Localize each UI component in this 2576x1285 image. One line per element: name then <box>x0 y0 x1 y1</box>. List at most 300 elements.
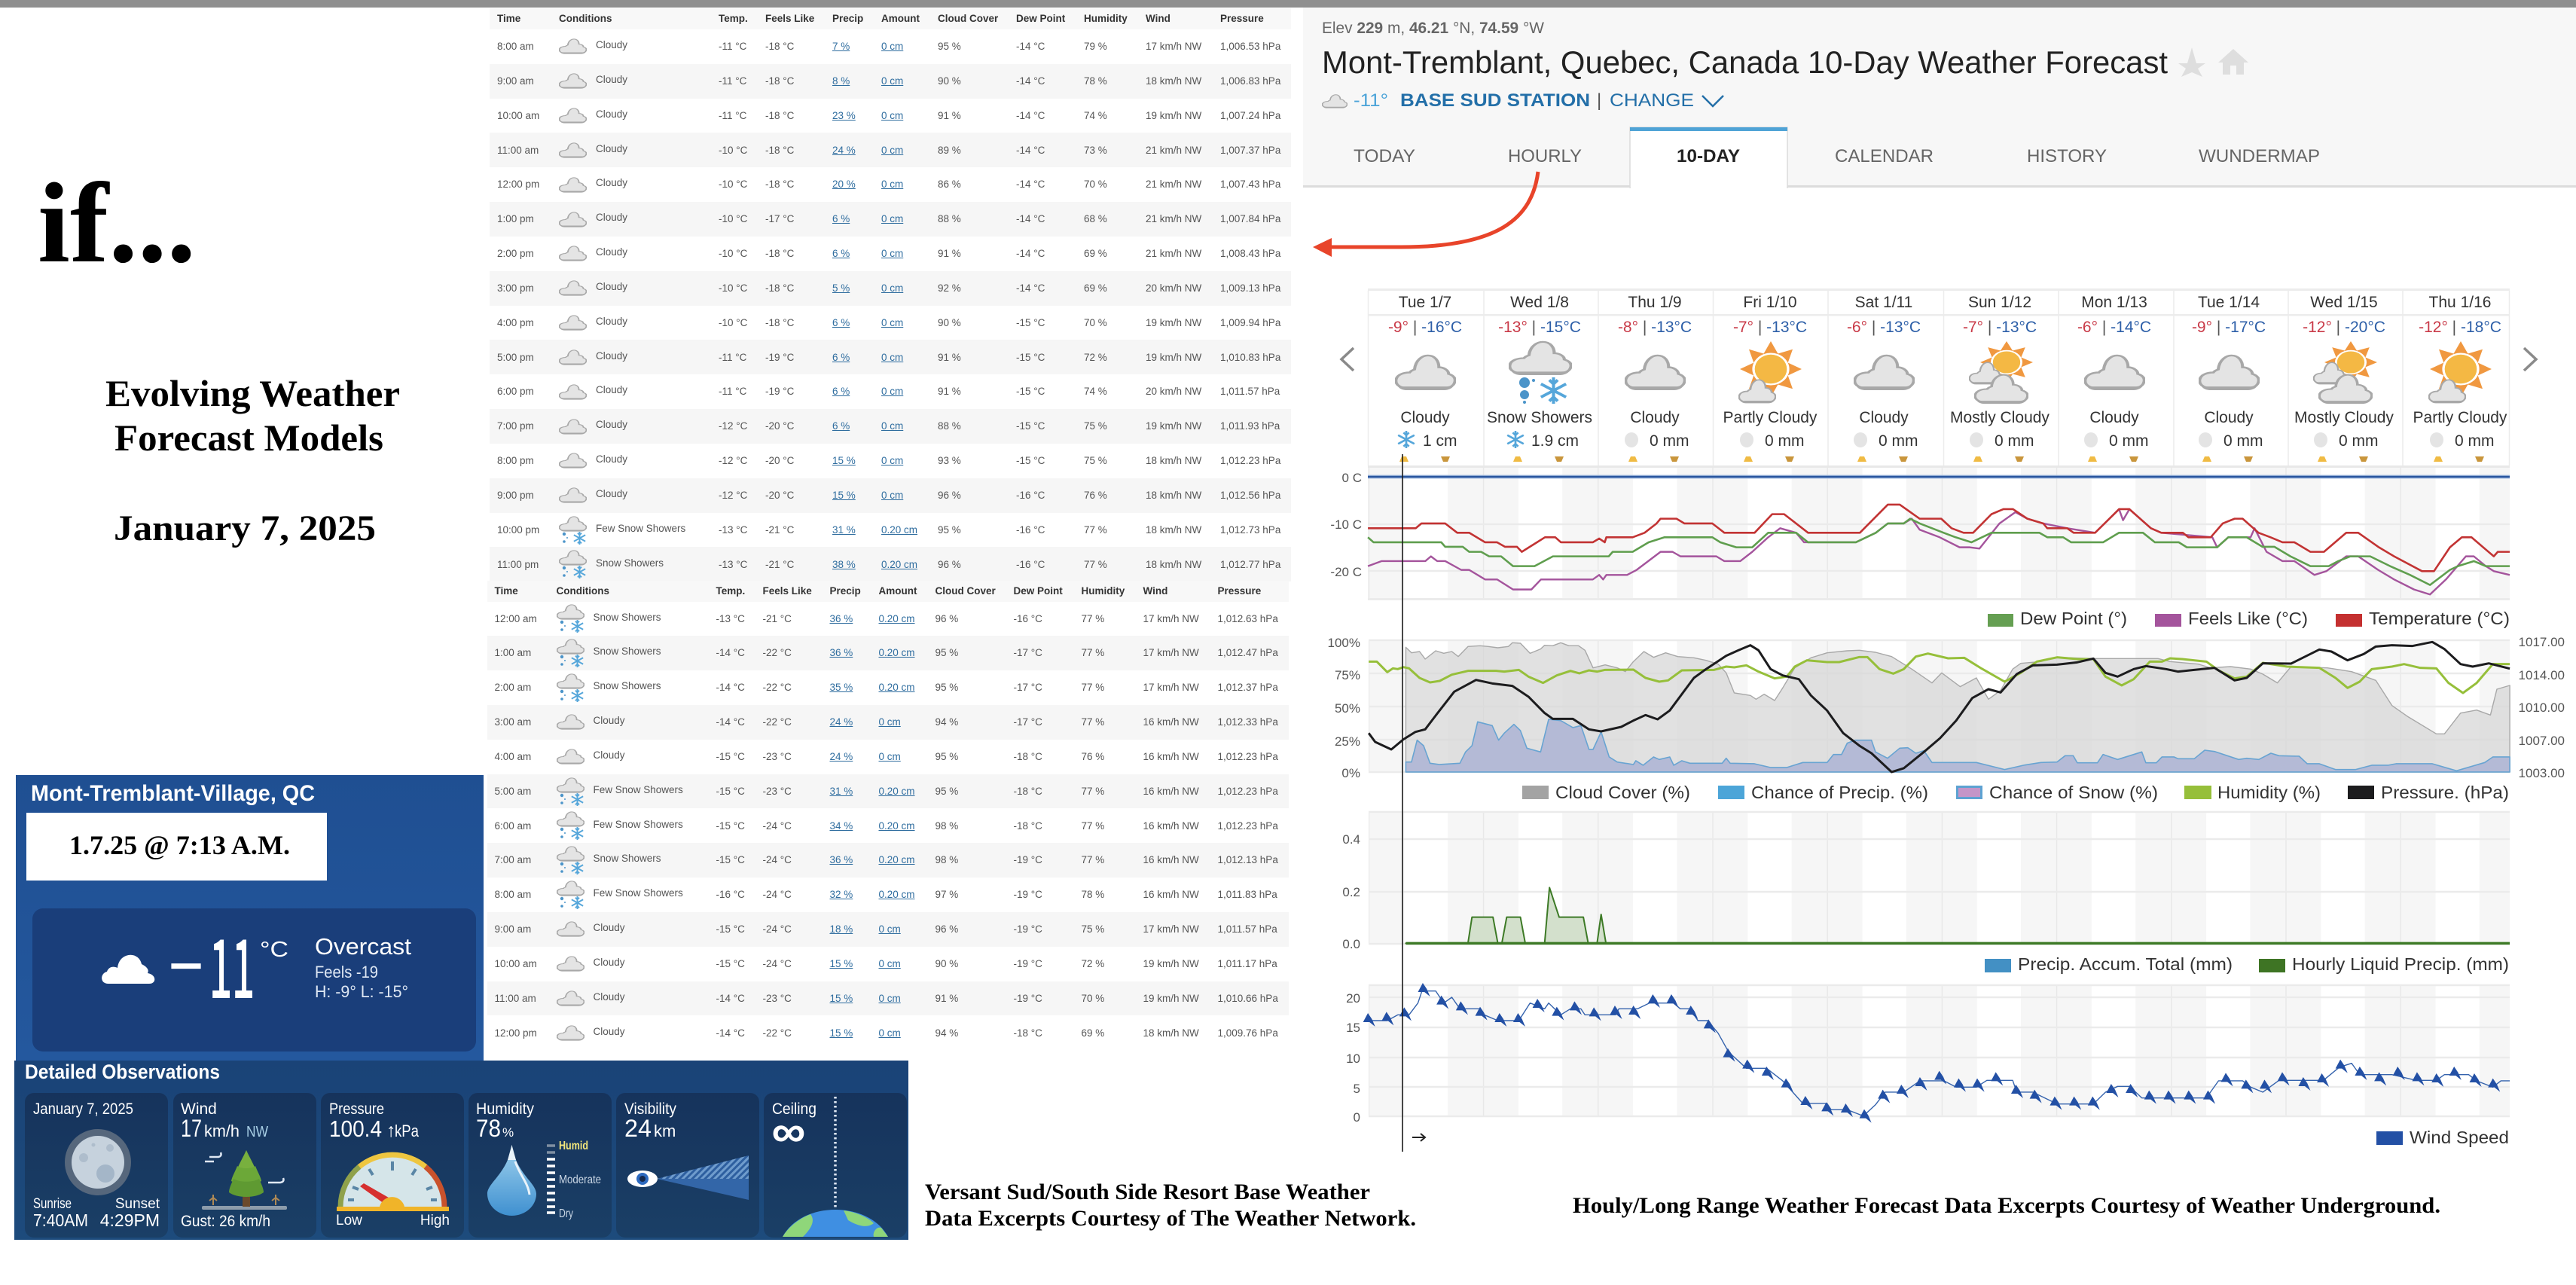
row 4:00 pm: 90 % <box>938 317 961 328</box>
card: ceiling <box>764 1093 907 1238</box>
row 7:00 pm: -20 °C <box>765 420 794 432</box>
right axis labels <box>2519 635 2565 780</box>
day: Thu 1/16 <box>2413 294 2507 462</box>
day: Wed 1/15: 0 mm <box>2339 432 2379 450</box>
day: Tue 1/7: Cloudy <box>1400 409 1450 426</box>
legend: atmosphere: Chance of Snow (%) <box>1989 783 2158 802</box>
card: date and moon: 4:29PM <box>100 1210 160 1230</box>
card: pressure: High <box>420 1213 450 1229</box>
day: Thu 1/9: -8° | -13°C <box>1618 319 1692 336</box>
row 6:00 pm: 1,011.57 hPa <box>1220 386 1280 397</box>
row 1:00 pm: 88 % <box>938 213 961 224</box>
row 5:00 am: -23 °C <box>762 786 792 797</box>
table header: Time <box>497 13 520 24</box>
row 6:00 am: -24 °C <box>762 820 792 832</box>
row 7:00 pm: 0 cm <box>881 420 903 432</box>
row 11:00 am: 0 cm <box>881 145 903 156</box>
legend: atmosphere: Chance of Precip. (%) <box>1751 783 1928 802</box>
table header: Temp. <box>719 13 748 24</box>
row 9:00 am <box>487 912 1288 947</box>
left axis labels <box>1328 636 1360 780</box>
area: hourly liquid precipitation <box>1406 887 1606 943</box>
area: cloud cover <box>1406 642 2510 772</box>
row 11:00 am: Cloudy <box>596 143 627 154</box>
row 1:00 pm: 1:00 pm <box>497 213 534 224</box>
row 9:00 pm: -16 °C <box>1016 490 1045 501</box>
row 6:00 pm: 6 % <box>832 386 850 397</box>
row 8:00 am: 78 % <box>1082 889 1104 900</box>
navigation tabs: HOURLY <box>1508 146 1582 166</box>
legend: atmosphere: Cloud Cover (%) <box>1555 783 1690 802</box>
row 9:00 am: 96 % <box>935 923 958 935</box>
subtitle: Evolving Weather Forecast Models <box>105 372 400 459</box>
panel: forecast page header <box>1303 8 2576 188</box>
row 7:00 am: 7:00 am <box>494 854 531 865</box>
row 10:00 am: 72 % <box>1082 958 1104 969</box>
row 8:00 pm: -12 °C <box>719 455 747 466</box>
legend: wind speed: Wind Speed <box>2410 1128 2509 1147</box>
row 9:00 am: Cloudy <box>594 922 625 933</box>
row 6:00 am <box>487 808 1288 843</box>
row 12:00 pm: 0 cm <box>881 179 903 190</box>
row 12:00 pm: 12:00 pm <box>494 1027 537 1039</box>
row 2:00 am <box>487 670 1288 705</box>
row 11:00 pm <box>490 547 1291 581</box>
row 8:00 am: 79 % <box>1084 41 1107 52</box>
row 5:00 pm: Cloudy <box>596 350 627 362</box>
row 7:00 pm: 7:00 pm <box>497 420 534 432</box>
row 3:00 am: 94 % <box>935 716 958 728</box>
row 7:00 pm: 19 km/h NW <box>1146 420 1201 432</box>
source note: The Weather Network: Versant Sud/South Side Resort Base Weather <box>925 1180 1370 1204</box>
row 9:00 pm: 9:00 pm <box>497 490 534 501</box>
row 3:00 am: Cloudy <box>594 715 625 726</box>
row 3:00 am: -14 °C <box>716 716 745 728</box>
line: humidity <box>1369 654 2510 693</box>
row 6:00 pm: 20 km/h NW <box>1146 386 1201 397</box>
day: Fri 1/10: Fri 1/10 <box>1743 294 1797 311</box>
row 12:00 pm <box>490 167 1291 202</box>
row 2:00 pm: 69 % <box>1084 248 1107 259</box>
row 11:00 am: -19 °C <box>1014 993 1042 1004</box>
row 5:00 pm: 72 % <box>1084 352 1107 363</box>
table header: Time <box>494 585 518 597</box>
row 4:00 pm: 19 km/h NW <box>1146 317 1201 328</box>
row 10:00 am: 0 cm <box>878 958 901 969</box>
current temperature card <box>32 905 476 1052</box>
row 8:00 am: 32 % <box>830 889 853 900</box>
condition text: Feels -19 <box>315 963 378 981</box>
row 9:00 pm <box>490 478 1291 513</box>
chart: temperature <box>1330 468 2510 628</box>
row 2:00 pm: 91 % <box>938 248 961 259</box>
legend: atmosphere: Pressure. (hPa) <box>2381 783 2509 802</box>
row 11:00 am: 15 % <box>830 993 853 1004</box>
day: Tue 1/7: Tue 1/7 <box>1399 294 1451 311</box>
source note: The Weather Network: Data Excerpts Courtesy of The Weather Network. <box>925 1206 1416 1231</box>
row 6:00 am: 16 km/h NW <box>1143 820 1199 832</box>
row 11:00 am: 21 km/h NW <box>1146 145 1201 156</box>
row 11:00 pm: 1,012.77 hPa <box>1220 559 1280 570</box>
row 5:00 pm: 0 cm <box>881 352 903 363</box>
row 6:00 am: -18 °C <box>1014 820 1042 832</box>
row 5:00 pm <box>490 340 1291 374</box>
row 11:00 am: -14 °C <box>716 993 745 1004</box>
row 10:00 pm: 0.20 cm <box>881 524 917 536</box>
row 5:00 am: 0.20 cm <box>878 786 915 797</box>
navigation tabs: TODAY <box>1354 146 1415 166</box>
row 12:00 pm: -18 °C <box>765 179 794 190</box>
row 12:00 pm: Cloudy <box>594 1026 625 1037</box>
row 4:00 am: 4:00 am <box>494 751 531 762</box>
navigation tabs: WUNDERMAP <box>2199 146 2320 166</box>
station line <box>1323 90 1723 111</box>
icon: moon <box>65 1129 131 1195</box>
row 1:00 am: 0.20 cm <box>878 647 915 658</box>
row 2:00 am: 35 % <box>830 682 853 693</box>
row 1:00 am: -22 °C <box>762 647 792 658</box>
heading: Detailed Observations <box>25 1061 220 1083</box>
row 10:00 am: 10:00 am <box>497 110 539 121</box>
row 12:00 am: Snow Showers <box>594 612 661 623</box>
row 4:00 am: 95 % <box>935 751 958 762</box>
active tab: 10-day <box>1630 127 1787 188</box>
row 5:00 am: 16 km/h NW <box>1143 786 1199 797</box>
legend: temperature: Temperature (°C) <box>2369 609 2510 628</box>
row 11:00 pm: -16 °C <box>1016 559 1045 570</box>
day: Mon 1/13: 0 mm <box>2109 432 2148 450</box>
axis labels: 15 <box>1346 1021 1360 1035</box>
row 1:00 am: 36 % <box>830 647 853 658</box>
row 11:00 am: 24 % <box>832 145 856 156</box>
table header: Pressure <box>1220 13 1264 24</box>
row 3:00 am: 77 % <box>1082 716 1104 728</box>
row 5:00 pm: 5:00 pm <box>497 352 534 363</box>
row 9:00 pm: 1,012.56 hPa <box>1220 490 1280 501</box>
hourly forecast table: January 7 <box>490 13 1291 581</box>
left axis labels: 100% <box>1328 636 1360 650</box>
day: Fri 1/10: -7° | -13°C <box>1733 319 1807 336</box>
row 2:00 am: 0.20 cm <box>878 682 915 693</box>
row 12:00 pm: 69 % <box>1082 1027 1104 1039</box>
row 2:00 am: Snow Showers <box>594 680 661 691</box>
day: Fri 1/10 <box>1723 294 1818 462</box>
row 2:00 pm: 21 km/h NW <box>1146 248 1201 259</box>
row 10:00 am: 1,011.17 hPa <box>1217 958 1277 969</box>
day: Sat 1/11: Cloudy <box>1859 409 1909 426</box>
row 4:00 am: Cloudy <box>594 749 625 761</box>
card: date and moon: Sunrise <box>33 1196 72 1212</box>
row 7:00 pm: -15 °C <box>1016 420 1045 432</box>
page title: Mont-Tremblant, Quebec, Canada 10-Day Weather Forecast <box>1322 44 2168 80</box>
axis labels: -10 C <box>1330 517 1362 532</box>
day: Fri 1/10: 0 mm <box>1765 432 1805 450</box>
icon: next chevron <box>2524 348 2536 371</box>
row 12:00 pm: 1,009.76 hPa <box>1217 1027 1278 1039</box>
top gray bar <box>0 0 2576 8</box>
card: visibility: km <box>654 1122 676 1140</box>
row 3:00 pm: -14 °C <box>1016 282 1045 294</box>
source note: The Weather Network <box>925 1180 1416 1231</box>
day: Sat 1/11: Sat 1/11 <box>1855 294 1912 311</box>
row 8:00 am: -11 °C <box>719 41 746 52</box>
icon: eye and view cone <box>627 1155 749 1200</box>
station line: CHANGE <box>1610 90 1694 111</box>
card: humidity: 78 <box>476 1115 501 1142</box>
arrow: red curved pointer <box>1313 172 1538 257</box>
day: Thu 1/16: Partly Cloudy <box>2413 409 2507 426</box>
subtitle: Evolving Weather Forecast Models: Evolving Weather <box>105 372 400 414</box>
icon: small time arrow <box>1412 1134 1425 1141</box>
table header: Conditions <box>559 13 612 24</box>
card: pressure: Pressure <box>329 1100 384 1118</box>
row 12:00 am: 0.20 cm <box>878 613 915 624</box>
row 5:00 am: 5:00 am <box>494 786 531 797</box>
legend: temperature <box>1988 609 2510 628</box>
timestamp box: 1.7.25 @ 7:13 A.M. <box>69 830 290 860</box>
row 1:00 pm: -14 °C <box>1016 213 1045 224</box>
row 11:00 pm: -13 °C <box>719 559 747 570</box>
row 6:00 am: Few Snow Showers <box>594 819 683 830</box>
row 10:00 am: 1,007.24 hPa <box>1220 110 1280 121</box>
icon: pressure gauge <box>337 1155 449 1211</box>
row 8:00 am <box>490 29 1291 64</box>
card: humidity: % <box>502 1125 514 1140</box>
card: visibility: 24 <box>624 1115 652 1142</box>
row 4:00 pm: Cloudy <box>596 316 627 327</box>
row 12:00 am: 17 km/h NW <box>1143 613 1199 624</box>
row 9:00 am: 17 km/h NW <box>1143 923 1199 935</box>
day: Wed 1/8: -13° | -15°C <box>1498 319 1581 336</box>
row 11:00 am: 1,010.66 hPa <box>1217 993 1278 1004</box>
legend: temperature: Dew Point (°) <box>2020 609 2127 628</box>
row 4:00 pm: 70 % <box>1084 317 1107 328</box>
hourly forecast table: January 8 <box>487 585 1289 1041</box>
row 8:00 am: 0 cm <box>881 41 903 52</box>
day: Wed 1/8: 1.9 cm <box>1531 432 1579 450</box>
row 3:00 pm <box>490 271 1291 306</box>
legend: atmosphere: Humidity (%) <box>2217 783 2321 802</box>
row 10:00 am: 10:00 am <box>494 958 537 969</box>
table header: Temp. <box>716 585 745 597</box>
day: Sun 1/12: Sun 1/12 <box>1968 294 2031 311</box>
temperature reading: − <box>169 930 203 1002</box>
row 11:00 pm: Snow Showers <box>596 557 664 569</box>
row 8:00 pm: Cloudy <box>596 453 627 465</box>
row 8:00 am: 0.20 cm <box>878 889 915 900</box>
row 12:00 am: 77 % <box>1082 613 1104 624</box>
row 12:00 am: 1,012.63 hPa <box>1217 613 1278 624</box>
station line: | <box>1597 90 1601 111</box>
row 5:00 pm: 91 % <box>938 352 961 363</box>
card: wind: Gust: 26 km/h <box>181 1213 270 1230</box>
row 7:00 am: 16 km/h NW <box>1143 854 1199 865</box>
row 9:00 am: -15 °C <box>716 923 745 935</box>
row 5:00 am: Few Snow Showers <box>594 784 683 795</box>
axis labels: 10 <box>1346 1052 1360 1066</box>
row 5:00 am <box>487 774 1288 808</box>
row 2:00 am: -14 °C <box>716 682 745 693</box>
legend: temperature: Feels Like (°C) <box>2188 609 2308 628</box>
left axis labels: 25% <box>1335 734 1360 749</box>
row 2:00 pm: -14 °C <box>1016 248 1045 259</box>
row 12:00 pm: 70 % <box>1084 179 1107 190</box>
day: Tue 1/14: Cloudy <box>2204 409 2254 426</box>
row 6:00 am: 77 % <box>1082 820 1104 832</box>
day: Thu 1/9: Thu 1/9 <box>1628 294 1682 311</box>
row 1:00 pm: 6 % <box>832 213 850 224</box>
row 11:00 am: -18 °C <box>765 145 794 156</box>
table header: Precip <box>830 585 861 597</box>
row 6:00 pm: -15 °C <box>1016 386 1045 397</box>
row 9:00 am: 75 % <box>1082 923 1104 935</box>
day: Sun 1/12: -7° | -13°C <box>1963 319 2037 336</box>
row 11:00 am: -10 °C <box>719 145 747 156</box>
row 7:00 pm: -12 °C <box>719 420 747 432</box>
table header: Wind <box>1146 13 1170 24</box>
day: Thu 1/16: 0 mm <box>2455 432 2495 450</box>
card: ceiling: ∞ <box>772 1110 805 1154</box>
subtitle: Evolving Weather Forecast Models: Forecast Models <box>114 417 383 459</box>
row 10:00 pm <box>490 513 1291 547</box>
day: Wed 1/15: Wed 1/15 <box>2310 294 2378 311</box>
row 9:00 pm: 96 % <box>938 490 961 501</box>
row 9:00 pm: -20 °C <box>765 490 794 501</box>
row 8:00 pm: 93 % <box>938 455 961 466</box>
row 8:00 am: -18 °C <box>765 41 794 52</box>
row 8:00 am: -14 °C <box>1016 41 1045 52</box>
row 11:00 am: 91 % <box>935 993 958 1004</box>
card: date and moon: Sunset <box>115 1196 160 1212</box>
row 8:00 am: Few Snow Showers <box>594 887 683 899</box>
card: visibility <box>616 1093 759 1238</box>
card: pressure: 100.4 <box>329 1116 382 1142</box>
row 11:00 pm: 77 % <box>1084 559 1107 570</box>
temperature reading <box>169 905 288 1021</box>
row 9:00 am: Cloudy <box>596 74 627 85</box>
row 11:00 am: 0 cm <box>878 993 901 1004</box>
card: wind <box>173 1093 316 1238</box>
row 4:00 pm <box>490 306 1291 340</box>
row 10:00 pm: -13 °C <box>719 524 747 536</box>
row 7:00 am: -24 °C <box>762 854 792 865</box>
row 4:00 am: 16 km/h NW <box>1143 751 1199 762</box>
station line: -11° <box>1354 90 1388 111</box>
axis labels: 20 <box>1346 991 1360 1006</box>
right axis labels: 1003.00 <box>2519 766 2565 780</box>
row 10:00 am: -14 °C <box>1016 110 1045 121</box>
row 5:00 pm: 19 km/h NW <box>1146 352 1201 363</box>
day: Sat 1/11: -6° | -13°C <box>1847 319 1921 336</box>
card: ceiling: Ceiling <box>772 1100 816 1118</box>
navigation tabs <box>1354 127 2320 188</box>
row 6:00 pm: 6:00 pm <box>497 386 534 397</box>
row 5:00 am: 77 % <box>1082 786 1104 797</box>
row 4:00 am: 1,012.23 hPa <box>1217 751 1278 762</box>
row 1:00 am: 17 km/h NW <box>1143 647 1199 658</box>
elevation and coordinates: Elev 229 m, 46.21 °N, 74.59 °W <box>1322 20 1544 37</box>
axis labels: 0.4 <box>1342 832 1360 847</box>
table header: Dew Point <box>1016 13 1065 24</box>
condition text: H: -9° L: -15° <box>315 982 408 1001</box>
row 4:00 pm: 0 cm <box>881 317 903 328</box>
row 9:00 am: 9:00 am <box>497 75 534 87</box>
row 9:00 am: 8 % <box>832 75 850 87</box>
row 9:00 am: 90 % <box>938 75 961 87</box>
day: Mon 1/13: Cloudy <box>2089 409 2139 426</box>
row 12:00 am: -16 °C <box>1014 613 1042 624</box>
row 8:00 am: -24 °C <box>762 889 792 900</box>
table header <box>487 580 1288 601</box>
row 9:00 am: -11 °C <box>719 75 746 87</box>
row 4:00 pm: 6 % <box>832 317 850 328</box>
row 2:00 pm: 6 % <box>832 248 850 259</box>
chart: wind speed <box>1346 983 2510 1147</box>
row 1:00 pm: 68 % <box>1084 213 1107 224</box>
table header: Feels Like <box>762 585 812 597</box>
day: Mon 1/13: -6° | -14°C <box>2077 319 2151 336</box>
legend: precipitation: Hourly Liquid Precip. (mm) <box>2292 954 2509 974</box>
row 3:00 pm: 92 % <box>938 282 961 294</box>
day: Mon 1/13: Mon 1/13 <box>2081 294 2147 311</box>
row 8:00 am <box>487 878 1288 912</box>
station line: BASE SUD STATION <box>1400 90 1590 111</box>
row 9:00 am: -18 °C <box>765 75 794 87</box>
card: wind: Wind <box>181 1100 217 1118</box>
row 11:00 pm: 38 % <box>832 559 856 570</box>
row 10:00 am: 91 % <box>938 110 961 121</box>
row 2:00 am: 95 % <box>935 682 958 693</box>
row 8:00 am: 8:00 am <box>494 889 531 900</box>
row 1:00 am <box>487 636 1288 670</box>
row 9:00 pm: Cloudy <box>596 488 627 499</box>
line: pressure <box>1369 642 2510 772</box>
source note: Weather Underground: Houly/Long Range Weather Forecast Data Excerpts Courtesy of Weather Underground. <box>1573 1193 2440 1218</box>
row 7:00 pm: 75 % <box>1084 420 1107 432</box>
day: Tue 1/7 <box>1388 294 1462 462</box>
row 9:00 am <box>490 64 1291 99</box>
row 7:00 pm <box>490 409 1291 444</box>
row 10:00 am: 23 % <box>832 110 856 121</box>
row 11:00 am: 70 % <box>1082 993 1104 1004</box>
row 7:00 am: 1,012.13 hPa <box>1217 854 1278 865</box>
humidity scale <box>547 1140 601 1220</box>
row 12:00 pm: 1,007.43 hPa <box>1220 179 1280 190</box>
row 10:00 pm: -16 °C <box>1016 524 1045 536</box>
axis labels: 0.2 <box>1342 885 1360 899</box>
table header: Amount <box>878 585 917 597</box>
table header: Precip <box>832 13 863 24</box>
row 10:00 am: 74 % <box>1084 110 1107 121</box>
row 10:00 pm: 10:00 pm <box>497 524 539 536</box>
row 8:00 am: 16 km/h NW <box>1143 889 1199 900</box>
right axis labels: 1017.00 <box>2519 635 2565 649</box>
row 10:00 pm: 31 % <box>832 524 856 536</box>
left axis labels: 0% <box>1341 766 1360 780</box>
row 12:00 pm: 0 cm <box>878 1027 901 1039</box>
row 4:00 pm: 1,009.94 hPa <box>1220 317 1280 328</box>
row 7:00 am: 98 % <box>935 854 958 865</box>
humidity scale: Moderate <box>559 1174 601 1186</box>
row 3:00 am: 1,012.33 hPa <box>1217 716 1278 728</box>
row 9:00 am: 0 cm <box>881 75 903 87</box>
row 2:00 pm: 0 cm <box>881 248 903 259</box>
row 5:00 am: 1,012.23 hPa <box>1217 786 1278 797</box>
row 12:00 pm: -18 °C <box>1014 1027 1042 1039</box>
row 1:00 pm: 21 km/h NW <box>1146 213 1201 224</box>
axis labels: 0 <box>1354 1110 1360 1125</box>
legend: precipitation: Precip. Accum. Total (mm) <box>2018 954 2233 974</box>
